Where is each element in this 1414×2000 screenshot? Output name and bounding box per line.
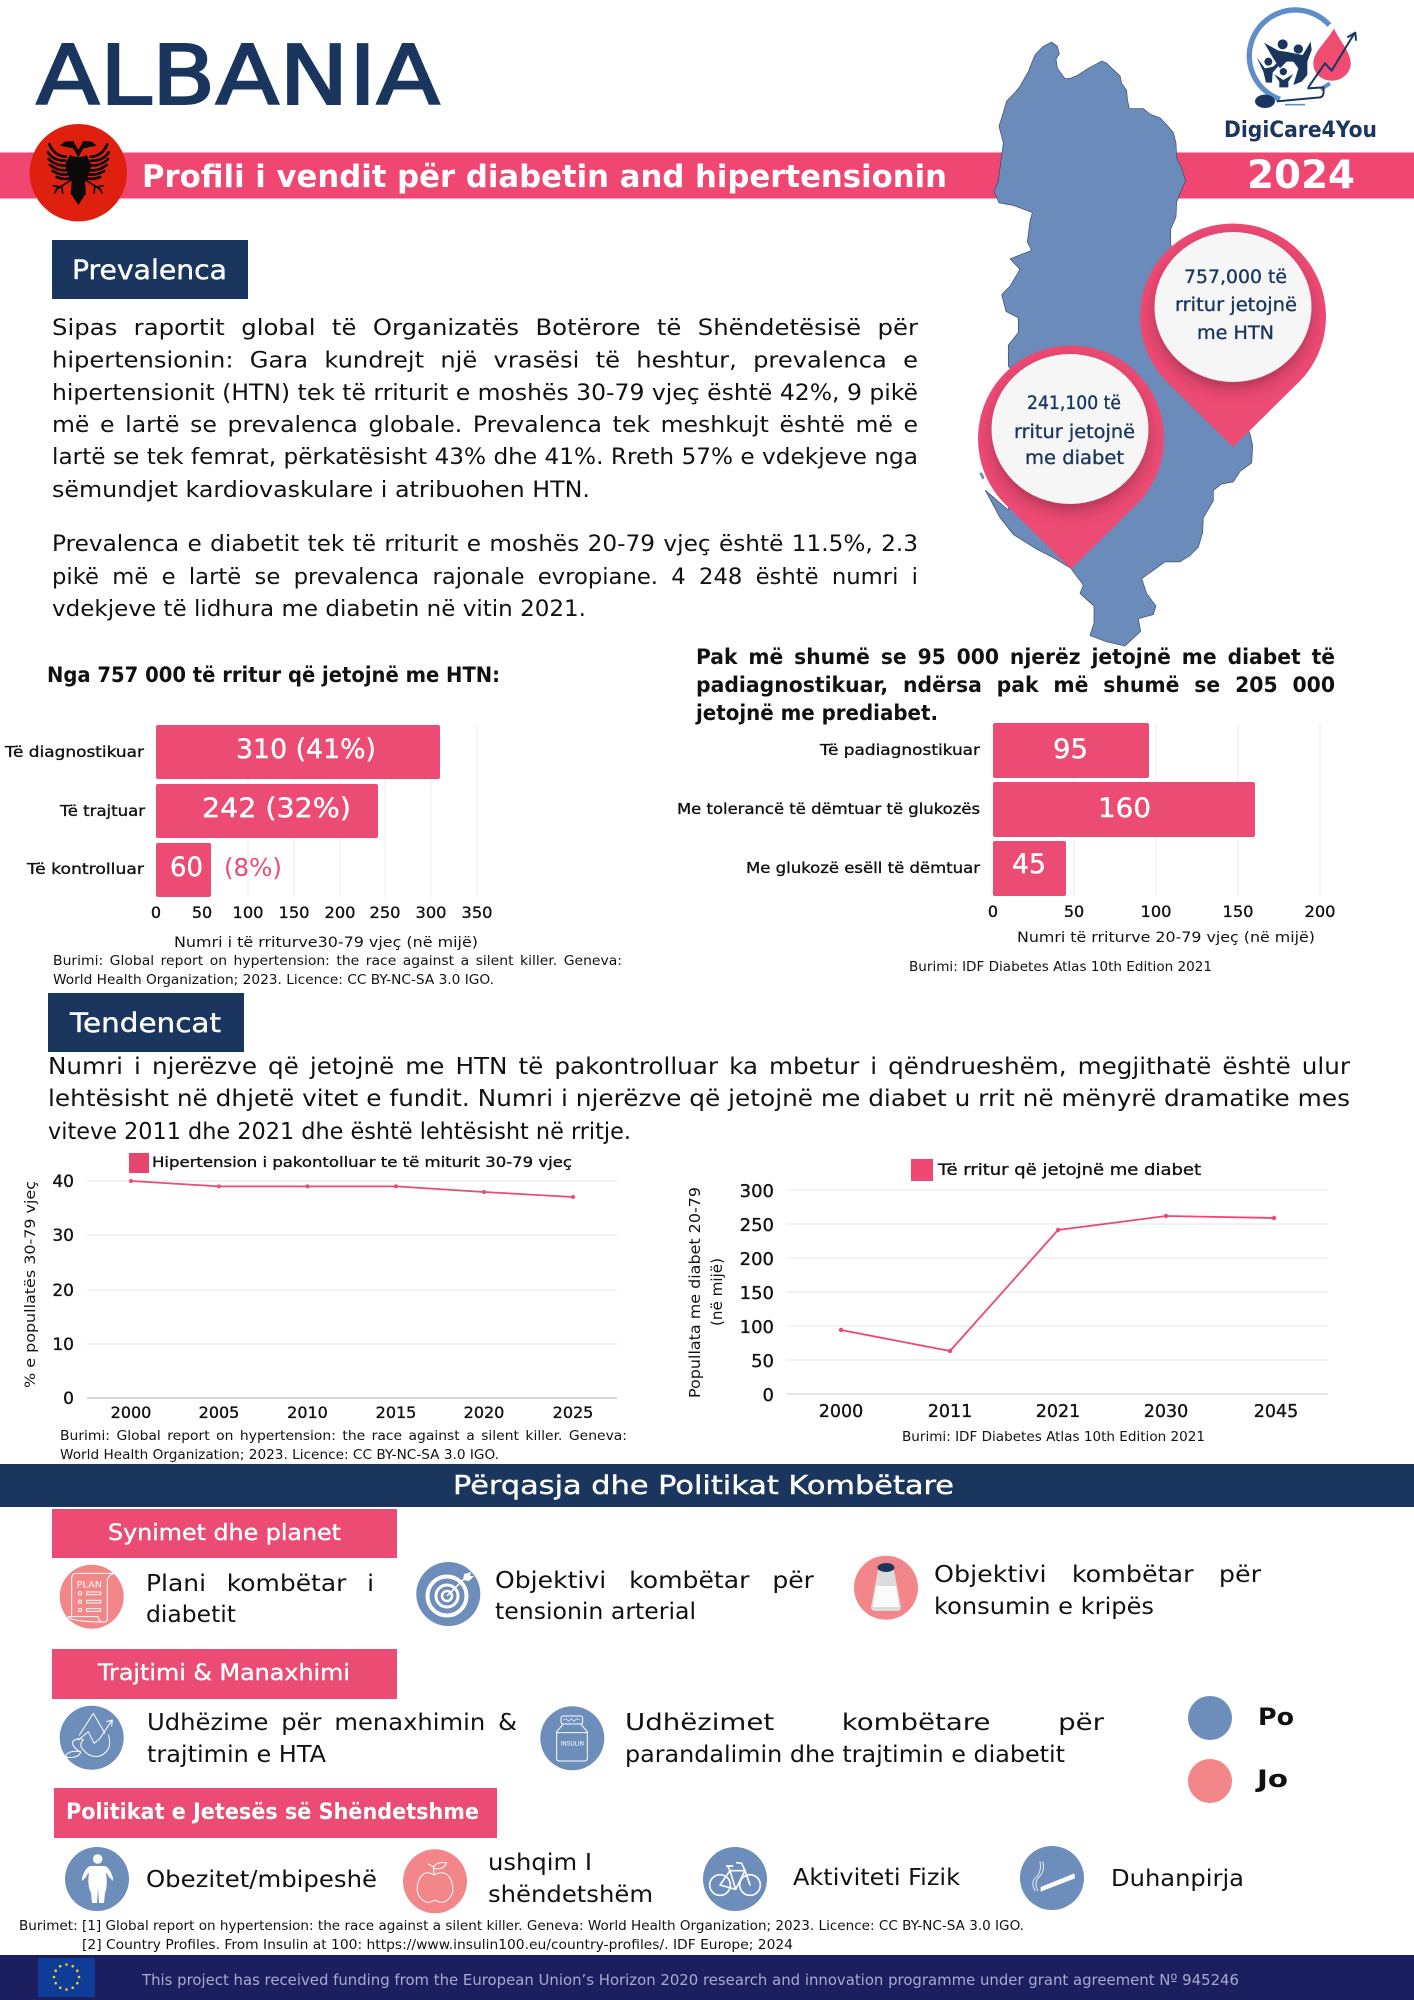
text: diabetes plan — [146, 1569, 374, 1628]
x axis labels: 2000 — [819, 1402, 863, 1422]
year: 2024 — [1247, 153, 1355, 198]
bar chart: undiagnosed diabetes and prediabetes — [677, 723, 1336, 946]
x axis labels: 2005 — [199, 1403, 239, 1422]
text: physical activity: Aktiviteti Fizik — [793, 1863, 960, 1891]
banner: national policies — [0, 1464, 1414, 1507]
text: salt target: konsumin e kripës — [934, 1592, 1154, 1620]
source: hypertension chart: Burimi: Global report on hypertension: the race against a silent killer. Geneva: — [53, 953, 622, 969]
icon: insulin: INSULIN — [561, 1740, 584, 1747]
bar: undiagnosed: 95 — [1053, 734, 1088, 765]
y axis labels — [52, 1172, 74, 1409]
category labels: Të kontrolluar — [26, 860, 145, 878]
axis ticks — [988, 902, 1336, 921]
subheading: goals and plans: Synimet dhe planet — [108, 1521, 341, 1546]
axis ticks: 200 — [324, 903, 356, 922]
legend — [129, 1153, 572, 1173]
y axis title: Popullata me diabet 20-79 — [686, 1187, 704, 1398]
icon: insulin — [540, 1706, 604, 1770]
y axis title: % e popullatës 30-79 vjeç — [23, 1181, 39, 1388]
text block: hypertension prevalence: hipertensionit (HTN) tek të rriturit e moshës 30-79 vjeç është 42%, 9 pikë — [52, 380, 918, 406]
text: hypertension guidelines: trajtimin e HTA — [147, 1740, 326, 1768]
y axis labels: 100 — [740, 1317, 774, 1338]
text block: trends: Numri i njerëzve që jetojnë me HTN të pakontrolluar ka mbetur i qëndrueshëm, megjithatë është ulur — [48, 1054, 1351, 1080]
axis ticks: 100 — [1140, 902, 1172, 921]
text: healthy diet — [488, 1848, 653, 1908]
section heading: Prevalenca: Prevalenca — [72, 255, 227, 286]
subheading: healthy lifestyle policies: Politikat e Jetesës së Shëndetshme — [66, 1800, 479, 1825]
icon: EU flag — [38, 1958, 95, 1997]
bar: treated: 242 (32%) — [202, 793, 351, 824]
icon: smoking — [1020, 1846, 1084, 1910]
y axis labels: 0 — [63, 1389, 74, 1409]
axis ticks: 200 — [1304, 902, 1336, 921]
text block: diabetes prevalence: vdekjeve të lidhura me diabetin në vitin 2021. — [52, 596, 586, 622]
banner: national policies: Përqasja dhe Politikat Kombëtare — [453, 1471, 954, 1501]
logo drop — [1313, 28, 1351, 81]
legend: Hipertension i pakontolluar te të miturit 30-79 vjeç — [152, 1155, 572, 1171]
axis title: Numri i të rriturve30-79 vjeç (në mijë) — [174, 935, 478, 951]
subheading: healthy lifestyle policies — [54, 1788, 497, 1838]
axis ticks: 150 — [1222, 902, 1254, 921]
category labels: Të diagnostikuar — [4, 743, 145, 761]
logo text: DigiCare4You — [1224, 118, 1377, 143]
text: obesity: Obezitet/mbipeshë — [146, 1865, 377, 1893]
icon: plan — [60, 1565, 124, 1629]
callout pin: diabetes: 241,100 të — [1027, 393, 1121, 414]
x axis labels: 2020 — [464, 1403, 504, 1422]
flag icon — [30, 124, 127, 221]
y axis labels: 250 — [740, 1215, 774, 1236]
category labels: Me glukozë esëll të dëmtuar — [746, 859, 981, 877]
icon: target — [416, 1562, 480, 1626]
x axis labels — [819, 1402, 1298, 1422]
bar: diagnosed — [156, 725, 440, 779]
source: hypertension trend — [60, 1428, 627, 1463]
text block: diabetes prevalence: pikë më e lartë se prevalenca rajonale evropiane. 4 248 është numri i — [52, 564, 918, 590]
heading: diabetes cascade: Pak më shumë se 95 000 njerëz jetojnë me diabet të — [696, 645, 1335, 669]
y axis title: (në mijë) — [708, 1258, 726, 1326]
eagle — [48, 141, 109, 205]
heading: hypertension cascade: Nga 757 000 të rritur që jetojnë me HTN: — [47, 663, 500, 687]
subheading: treatment and management: Trajtimi & Manaxhimi — [97, 1661, 350, 1686]
icon: hypertension monitor — [60, 1706, 124, 1770]
line chart: uncontrolled hypertension — [23, 1153, 617, 1422]
bar: controlled — [156, 843, 282, 897]
axis ticks: 350 — [462, 903, 492, 922]
text: hypertension guidelines — [147, 1708, 517, 1768]
legend — [911, 1159, 1201, 1181]
text block: diabetes prevalence: Prevalenca e diabetit tek të rriturit e moshës 20-79 vjeç është 11.5%, 2.3 — [52, 531, 918, 557]
category labels: Me tolerancë të dëmtuar të glukozës — [677, 800, 980, 818]
source: diabetes trend: Burimi: IDF Diabetes Atlas 10th Edition 2021 — [902, 1429, 1205, 1445]
text: healthy diet: ushqim I — [488, 1848, 592, 1876]
callout pin: hypertension — [1140, 224, 1326, 447]
text: blood pressure target — [495, 1566, 814, 1625]
x axis labels: 2010 — [287, 1403, 328, 1422]
text block: trends: lehtësisht në dhjetë vitet e fundit. Numri i njerëzve që jetojnë me diabet u rrit në mënyrë dramatike mes — [48, 1086, 1350, 1112]
source: hypertension chart: World Health Organization; 2023. Licence: CC BY-NC-SA 3.0 IGO. — [53, 972, 494, 988]
y axis labels: 0 — [763, 1385, 774, 1406]
axis ticks: 150 — [278, 903, 310, 922]
axis ticks: 0 — [151, 903, 161, 922]
callout pin: hypertension: me HTN — [1197, 323, 1274, 344]
axis ticks: 300 — [416, 903, 446, 922]
y axis labels: 20 — [52, 1281, 74, 1301]
y axis labels: 150 — [740, 1283, 774, 1304]
text: blood pressure target: Objektivi kombëtar për — [495, 1566, 814, 1594]
line chart: adults with diabetes — [686, 1159, 1328, 1422]
text block: hypertension prevalence: Sipas raportit global të Organizatës Botërore të Shëndetësisë për — [52, 315, 919, 341]
text block: hypertension prevalence: hipertensionin: Gara kundrejt një vrasësi të heshtur, prevalenca e — [52, 348, 918, 374]
callout pin: diabetes — [978, 346, 1164, 569]
text: diabetes guidelines: Udhëzimet kombëtare për — [625, 1708, 1104, 1736]
logo: DigiCare4You — [1224, 10, 1377, 143]
x axis labels: 2045 — [1254, 1402, 1298, 1422]
y axis labels: 200 — [740, 1249, 774, 1270]
text block: hypertension prevalence — [52, 315, 919, 503]
text: diabetes plan: Plani kombëtar i — [146, 1569, 374, 1597]
logo family — [1257, 39, 1312, 87]
heading: diabetes cascade: padiagnostikuar, ndërsa pak më shumë se 205 000 — [696, 673, 1335, 697]
callout pin: hypertension: rritur jetojnë — [1175, 295, 1297, 316]
map of Albania — [979, 42, 1253, 646]
y axis labels: 300 — [740, 1181, 774, 1202]
diabetes line — [839, 1214, 1276, 1353]
bar chart: hypertension cascade — [4, 725, 493, 951]
axis ticks: 50 — [1064, 902, 1084, 921]
footer: funding: This project has received funding from the European Union’s Horizon 2020 research and innovation programme under grant agreement Nº 945246 — [141, 1971, 1239, 1989]
bar: treated — [156, 784, 378, 838]
x axis labels: 2025 — [553, 1403, 593, 1422]
axis ticks: 100 — [232, 903, 264, 922]
logo ring — [1249, 10, 1329, 99]
text: diabetes guidelines: parandalimin dhe trajtimin e diabetit — [625, 1740, 1065, 1768]
heading: diabetes cascade — [695, 645, 1335, 725]
subheading: treatment and management — [52, 1649, 397, 1699]
sources — [19, 1918, 1024, 1953]
text: salt target — [934, 1560, 1261, 1620]
axis ticks: 0 — [988, 902, 998, 921]
x axis labels: 2015 — [376, 1403, 416, 1422]
source: diabetes chart: Burimi: IDF Diabetes Atlas 10th Edition 2021 — [909, 959, 1212, 975]
heading: diabetes cascade: jetojnë me prediabet. — [695, 701, 938, 725]
bar: impaired fasting glucose: 45 — [1012, 849, 1046, 880]
icon: salt shaker — [854, 1556, 918, 1620]
legend item: yes: Po — [1258, 1703, 1294, 1731]
category labels: Të trajtuar — [59, 802, 146, 820]
x axis labels: 2000 — [111, 1403, 151, 1422]
axis ticks: 50 — [192, 903, 212, 922]
bar: undiagnosed — [993, 723, 1149, 778]
bar: impaired glucose tolerance: 160 — [1098, 793, 1151, 824]
source: hypertension trend: Burimi: Global report on hypertension: the race against a silent killer. Geneva: — [60, 1428, 627, 1444]
callout pin: diabetes: rritur jetojnë — [1014, 422, 1135, 443]
legend: yes and no — [1188, 1696, 1294, 1803]
bar: controlled: 60 — [170, 852, 203, 883]
axis ticks — [151, 903, 492, 922]
y axis labels: 50 — [751, 1351, 774, 1372]
subheading: goals and plans — [52, 1509, 397, 1558]
footer: funding — [0, 1955, 1414, 2000]
text: diabetes plan: diabetit — [146, 1600, 236, 1628]
x axis labels: 2011 — [928, 1402, 972, 1422]
text block: diabetes prevalence — [52, 531, 918, 622]
section heading: Tendencat — [48, 993, 244, 1052]
y axis labels: 30 — [52, 1226, 74, 1246]
text: smoking: Duhanpirja — [1111, 1864, 1244, 1892]
source: hypertension trend: World Health Organization; 2023. Licence: CC BY-NC-SA 3.0 IGO. — [60, 1447, 499, 1463]
hypertension line — [129, 1179, 575, 1199]
icon: apple — [403, 1849, 467, 1913]
text block: hypertension prevalence: më e lartë se prevalenca globale. Prevalenca tek meshkujt është më e — [52, 412, 918, 438]
axis ticks: 250 — [370, 903, 400, 922]
icon: bicycle — [703, 1847, 767, 1911]
sources: Burimet: [1] Global report on hypertension: the race against a silent killer. Geneva: World Health Organization; 2023. Licence: CC BY-NC-SA 3.0 IGO. — [19, 1918, 1024, 1934]
axis title: Numri të rriturve 20-79 vjeç (në mijë) — [1017, 930, 1315, 946]
header band — [0, 152, 1414, 198]
logo blood pressure line — [1277, 33, 1356, 101]
source: hypertension chart — [53, 953, 622, 988]
bar: diagnosed: 310 (41%) — [236, 734, 376, 765]
text: diabetes guidelines — [625, 1708, 1104, 1768]
sources: [2] Country Profiles. From Insulin at 100: https://www.insulin100.eu/country-profiles/. IDF Europe; 2024 — [82, 1937, 793, 1953]
x axis labels: 2021 — [1036, 1402, 1080, 1422]
category labels: Të padiagnostikuar — [819, 741, 981, 759]
callout pin: hypertension: 757,000 të — [1184, 267, 1287, 288]
legend: Të rritur që jetojnë me diabet — [937, 1160, 1201, 1179]
y axis title — [686, 1187, 726, 1398]
text: salt target: Objektivi kombëtar për — [934, 1560, 1261, 1588]
bar: impaired fasting glucose — [993, 841, 1066, 896]
text: blood pressure target: tensionin arterial — [495, 1597, 696, 1625]
legend item: no: Jo — [1255, 1765, 1288, 1793]
bar: controlled: (8%) — [224, 853, 282, 882]
text block: trends — [48, 1054, 1351, 1145]
y axis labels — [740, 1181, 774, 1406]
section heading: Prevalenca — [52, 240, 248, 299]
text: hypertension guidelines: Udhëzime për menaxhimin & — [147, 1708, 517, 1736]
text block: hypertension prevalence: sëmundjet kardiovaskulare i atribuohen HTN. — [52, 477, 590, 503]
icon: obesity — [65, 1847, 129, 1911]
category labels — [4, 743, 146, 878]
x axis labels — [111, 1403, 593, 1422]
y axis labels: 10 — [52, 1335, 74, 1355]
y axis labels: 40 — [52, 1172, 74, 1192]
callout pin: diabetes: me diabet — [1025, 448, 1124, 469]
category labels — [677, 741, 981, 877]
text block: trends: viteve 2011 dhe 2021 dhe është lehtësisht në rritje. — [48, 1119, 631, 1145]
text block: hypertension prevalence: lartë se tek femrat, përkatësisht 43% dhe 41%. Rreth 57% e vdekjeve nga — [52, 444, 918, 470]
section heading: Tendencat: Tendencat — [69, 1008, 221, 1039]
x axis labels: 2030 — [1144, 1402, 1188, 1422]
subtitle: Profili i vendit për diabetin and hipertensionin — [142, 159, 947, 195]
bar: impaired glucose tolerance — [993, 782, 1255, 837]
text: healthy diet: shëndetshëm — [488, 1880, 653, 1908]
title: ALBANIA — [36, 29, 440, 124]
icon: plan: PLAN — [77, 1580, 102, 1590]
